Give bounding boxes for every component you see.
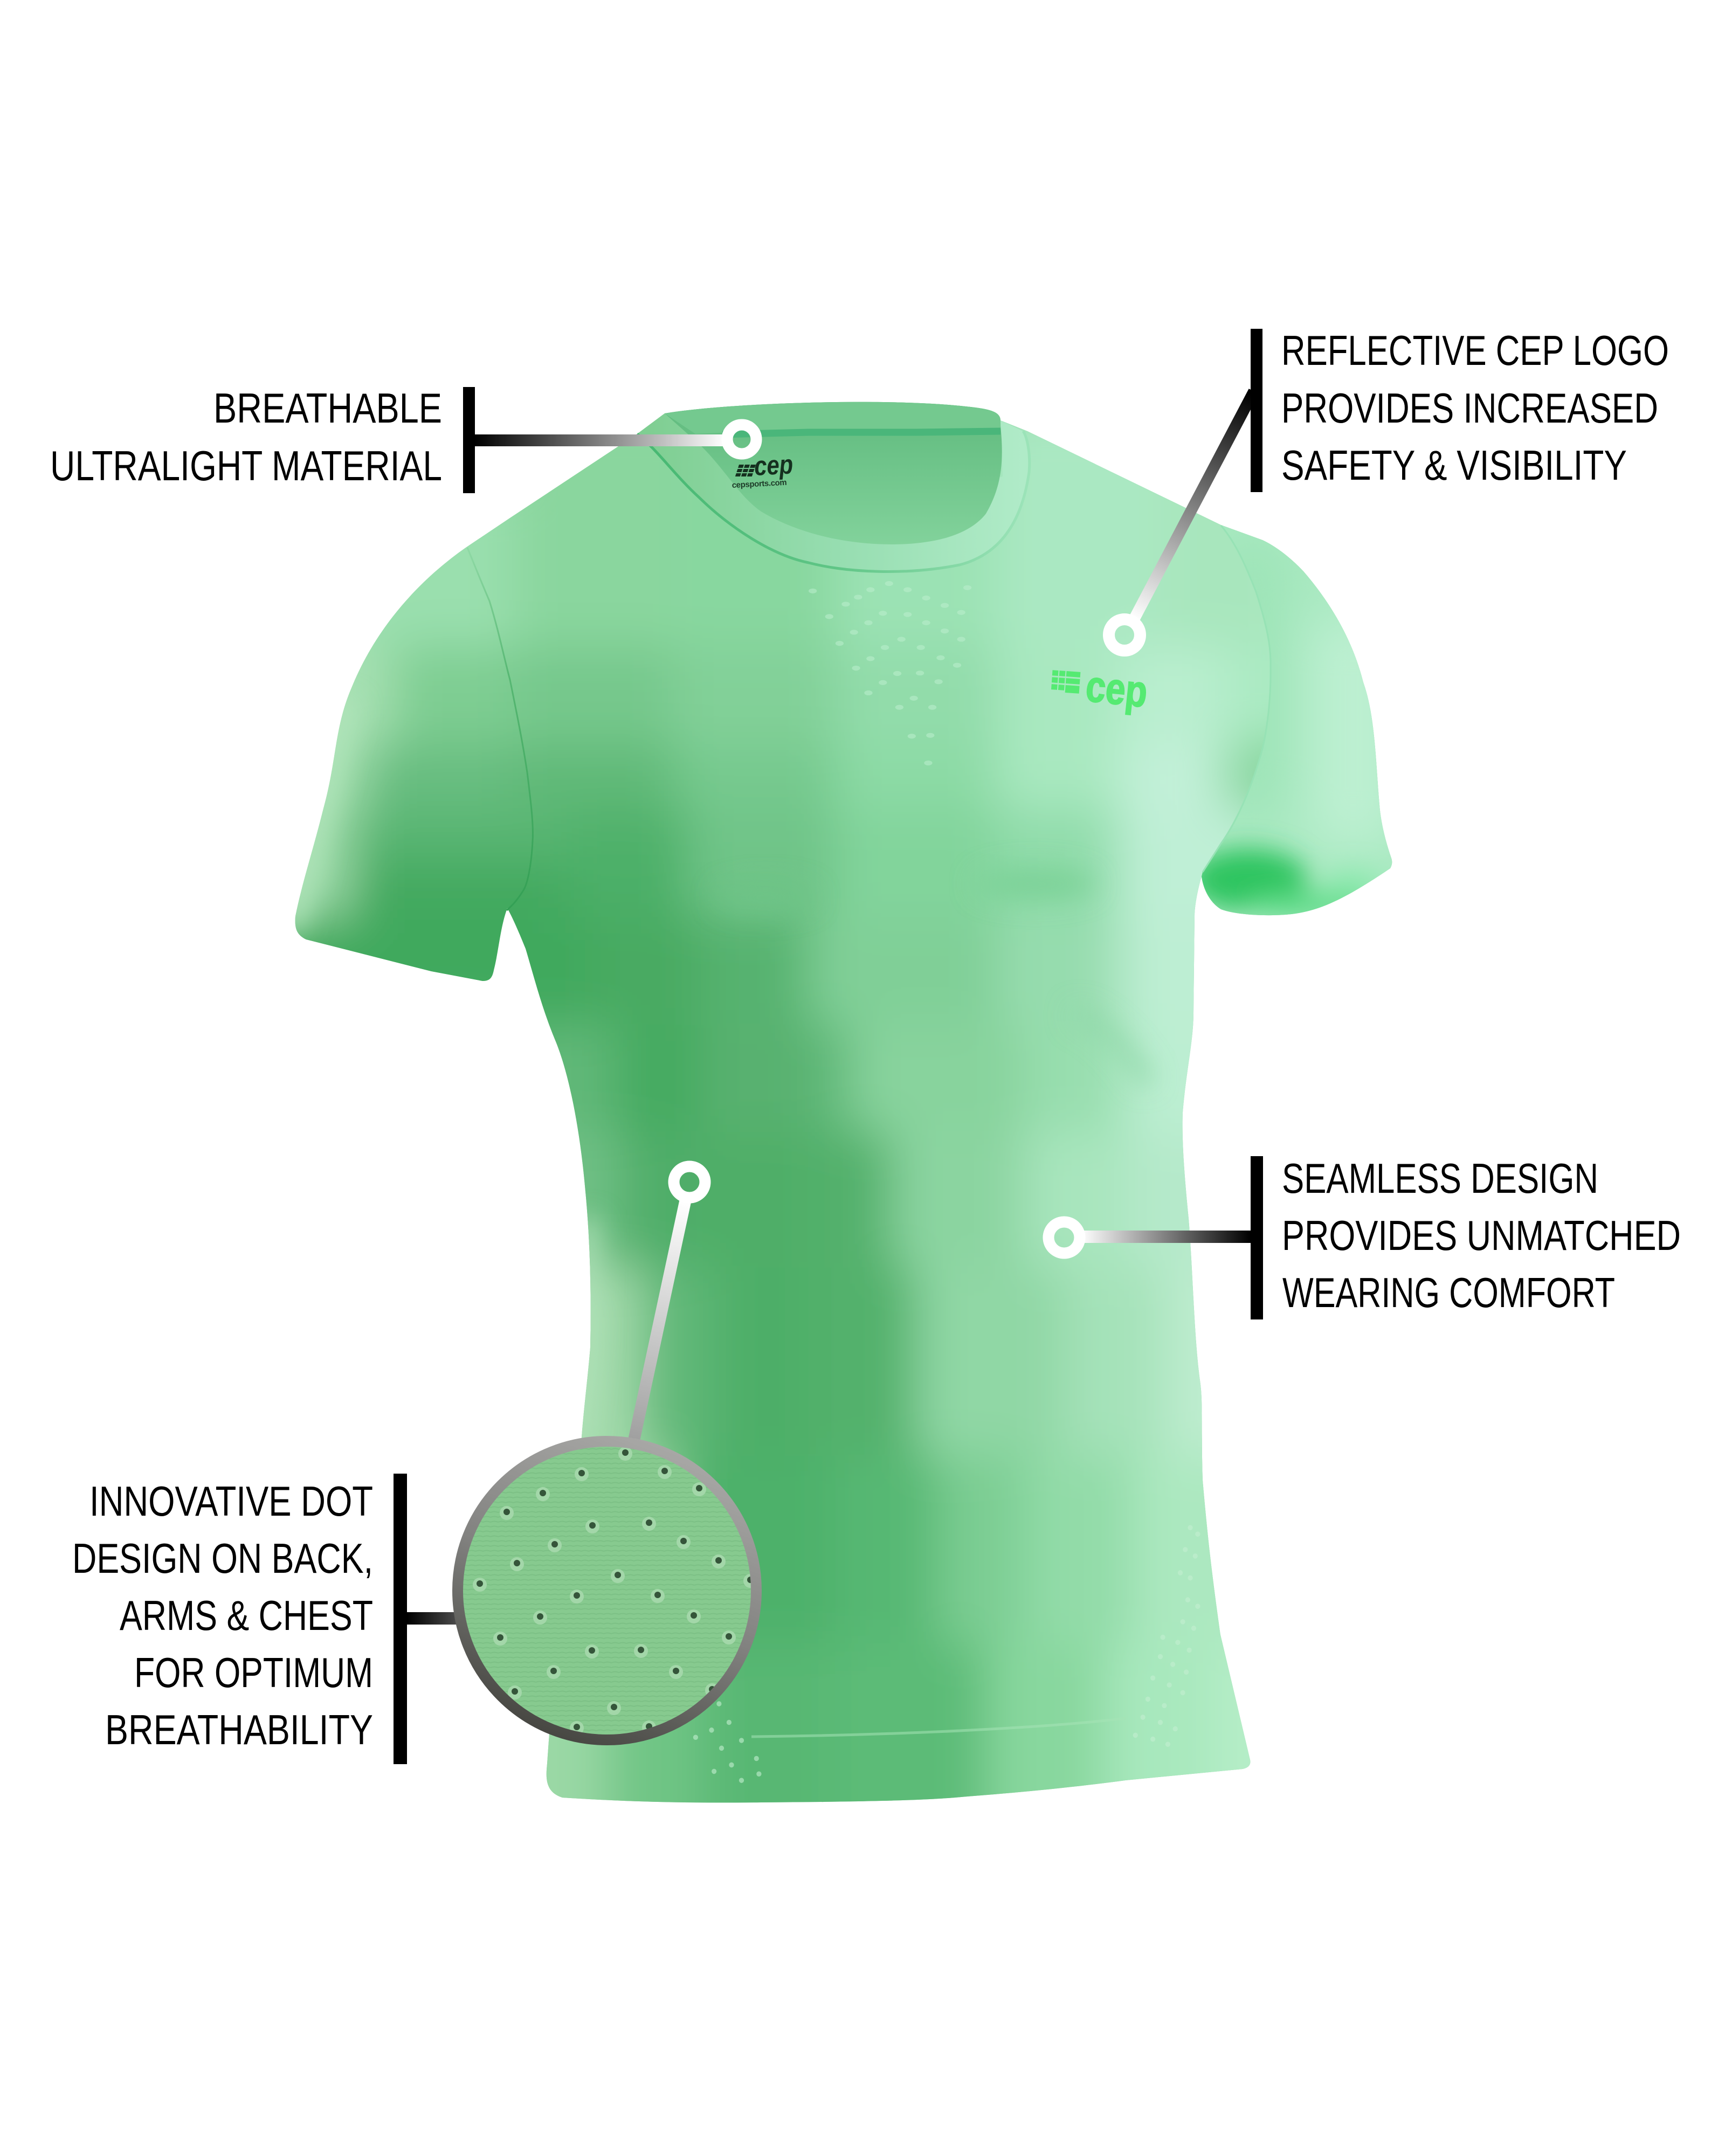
callout text xyxy=(1281,327,1669,489)
green compression t-shirt xyxy=(295,402,1392,1802)
shirt fabric shading xyxy=(295,402,1392,1802)
callout text: ARMS & CHEST xyxy=(120,1592,373,1639)
callout text xyxy=(72,1477,373,1753)
collar seam xyxy=(637,431,1030,571)
left sleeve seam xyxy=(467,548,533,910)
pin ring xyxy=(674,1166,705,1198)
horizontal connector xyxy=(402,1612,458,1625)
right sleeve seam xyxy=(1203,526,1271,872)
callout text: WEARING COMFORT xyxy=(1282,1269,1615,1316)
perforation dots xyxy=(473,1447,757,1735)
diagonal connector xyxy=(1133,391,1254,621)
callout text: FOR OPTIMUM xyxy=(134,1649,373,1696)
back collar band xyxy=(665,402,1000,434)
callout: seamless design xyxy=(1048,1155,1681,1319)
callout text: DESIGN ON BACK, xyxy=(72,1535,373,1582)
vertical bracket xyxy=(463,387,475,493)
label url: cepsports.com xyxy=(732,478,787,490)
callout text: BREATHABILITY xyxy=(105,1706,373,1753)
fabric texture xyxy=(460,1444,754,1737)
callout text: SAFETY & VISIBILITY xyxy=(1281,441,1627,489)
chest perforation dots xyxy=(809,581,971,765)
connector line to pin xyxy=(634,1199,686,1440)
inner neck label xyxy=(732,449,794,490)
connector bar xyxy=(469,434,728,446)
front collar rib xyxy=(637,413,1030,571)
label grid mark xyxy=(735,465,756,476)
callout text: ULTRALIGHT MATERIAL xyxy=(50,442,442,489)
callout: innovative dot design xyxy=(72,1166,757,1764)
back collar stitching xyxy=(722,431,1000,434)
vertical bracket xyxy=(1251,329,1262,492)
vertical bracket xyxy=(1251,1156,1263,1319)
logo grid mark xyxy=(1051,670,1080,694)
pin ring xyxy=(1048,1222,1080,1253)
hem line xyxy=(751,1718,1126,1737)
pin ring xyxy=(1109,619,1140,651)
label logo: cep xyxy=(754,449,794,481)
right sleeve with underside shadow xyxy=(1202,525,1392,915)
neck opening interior xyxy=(665,402,1002,544)
callout: breathable ultralight material xyxy=(50,384,756,493)
gradient ring xyxy=(458,1441,756,1740)
magnified fabric circle xyxy=(458,1441,757,1740)
hem perforation dots xyxy=(693,1525,1200,1783)
callout text: SEAMLESS DESIGN xyxy=(1282,1155,1598,1202)
callout text: INNOVATIVE DOT xyxy=(89,1477,373,1525)
logo wordmark: cep xyxy=(1084,661,1150,717)
callout text xyxy=(50,384,442,489)
pin ring xyxy=(727,425,756,454)
connector bar xyxy=(1078,1231,1252,1243)
callout: reflective cep logo xyxy=(1109,327,1669,651)
reflective cep chest logo xyxy=(1051,661,1150,717)
vertical bracket xyxy=(394,1474,407,1764)
callout text xyxy=(1282,1155,1681,1316)
callout text: BREATHABLE xyxy=(213,384,442,432)
